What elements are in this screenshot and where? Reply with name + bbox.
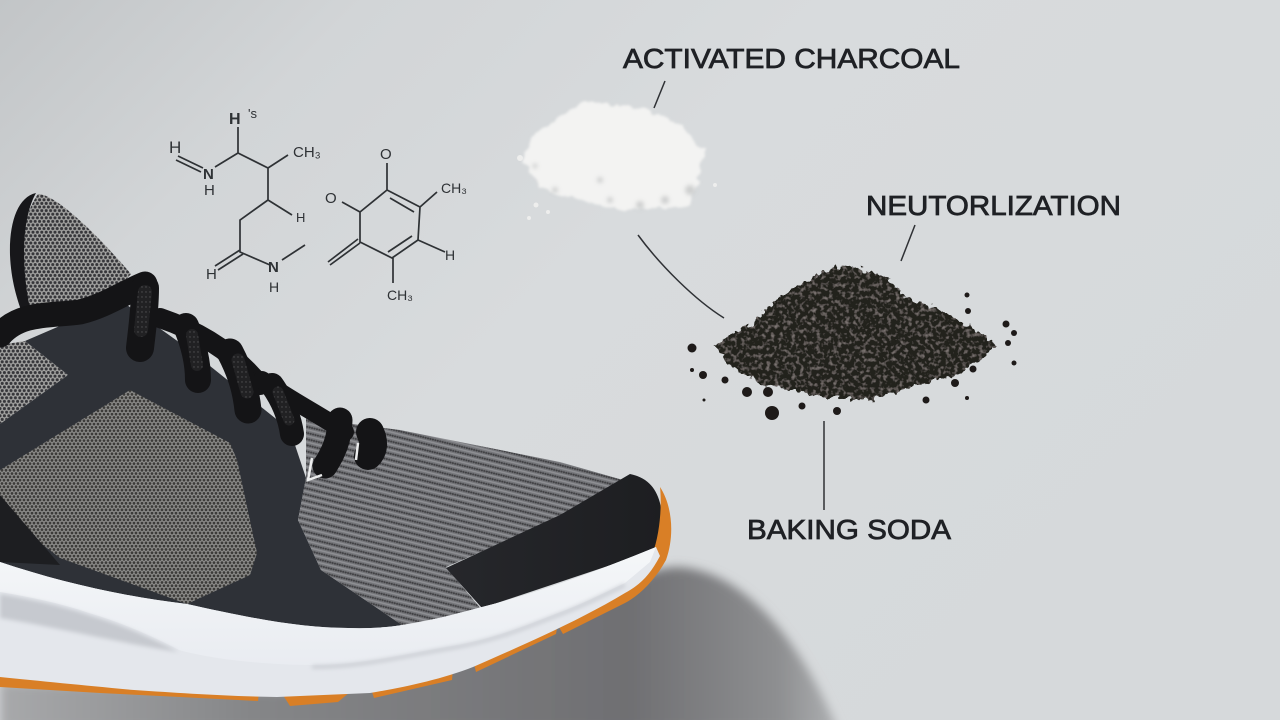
forefoot mesh xyxy=(298,418,630,625)
black powder pile xyxy=(688,265,1017,420)
lace loop 1 xyxy=(140,288,145,348)
structure: right molecule: O xyxy=(325,190,337,207)
molecular structures xyxy=(169,106,467,303)
white midsole xyxy=(0,547,660,697)
structure: right molecule: H xyxy=(445,247,455,263)
lace loop 6 xyxy=(368,432,373,456)
orange lugs xyxy=(0,487,671,706)
structure: right molecule xyxy=(325,146,467,303)
structure: left molecule: 's xyxy=(248,106,257,121)
structure: left molecule: CH₃ xyxy=(293,144,321,161)
structure: left molecule xyxy=(169,106,321,295)
label: baking soda: BAKING SODA xyxy=(747,514,951,545)
dark upper xyxy=(0,300,402,634)
lace loop 3 xyxy=(230,352,248,410)
midsole groove shade xyxy=(0,594,179,652)
midsole top band xyxy=(0,547,656,665)
laces xyxy=(0,284,373,466)
structure: right molecule: CH₃ xyxy=(441,180,467,196)
lace loop 4 xyxy=(272,385,292,434)
heel collar mesh xyxy=(20,194,131,322)
powder shading xyxy=(532,164,695,209)
structure: left molecule: H xyxy=(206,266,217,283)
connector lines xyxy=(638,81,915,510)
eyelet slivers xyxy=(308,443,358,480)
lace texture xyxy=(141,292,289,420)
label: activated charcoal: ACTIVATED CHARCOAL xyxy=(623,43,960,74)
rear quarter mesh xyxy=(0,341,68,424)
toe cap xyxy=(446,474,662,608)
structure: left molecule: N xyxy=(203,166,214,183)
structure: left molecule: N xyxy=(268,259,279,276)
white powder pile xyxy=(517,102,717,220)
structure: left molecule: H xyxy=(229,111,241,128)
structure: left molecule: H xyxy=(269,279,279,295)
shoe shadow xyxy=(0,567,838,720)
structure: right molecule: O xyxy=(380,146,392,163)
structure: right molecule: CH₃ xyxy=(387,287,413,303)
sneaker illustration xyxy=(0,193,671,706)
structure: left molecule: H xyxy=(296,210,305,225)
heel collar binding xyxy=(10,193,36,318)
structure: left molecule: H xyxy=(169,138,181,157)
lace loop 5 xyxy=(325,420,340,466)
structure: left molecule: H xyxy=(204,182,215,199)
lace bridge xyxy=(0,284,145,335)
side panel mesh xyxy=(0,390,257,604)
dark wedge lower left xyxy=(0,495,60,565)
label: neutralization: NEUTORLIZATION xyxy=(866,190,1121,221)
lace loop 2 xyxy=(186,326,198,380)
